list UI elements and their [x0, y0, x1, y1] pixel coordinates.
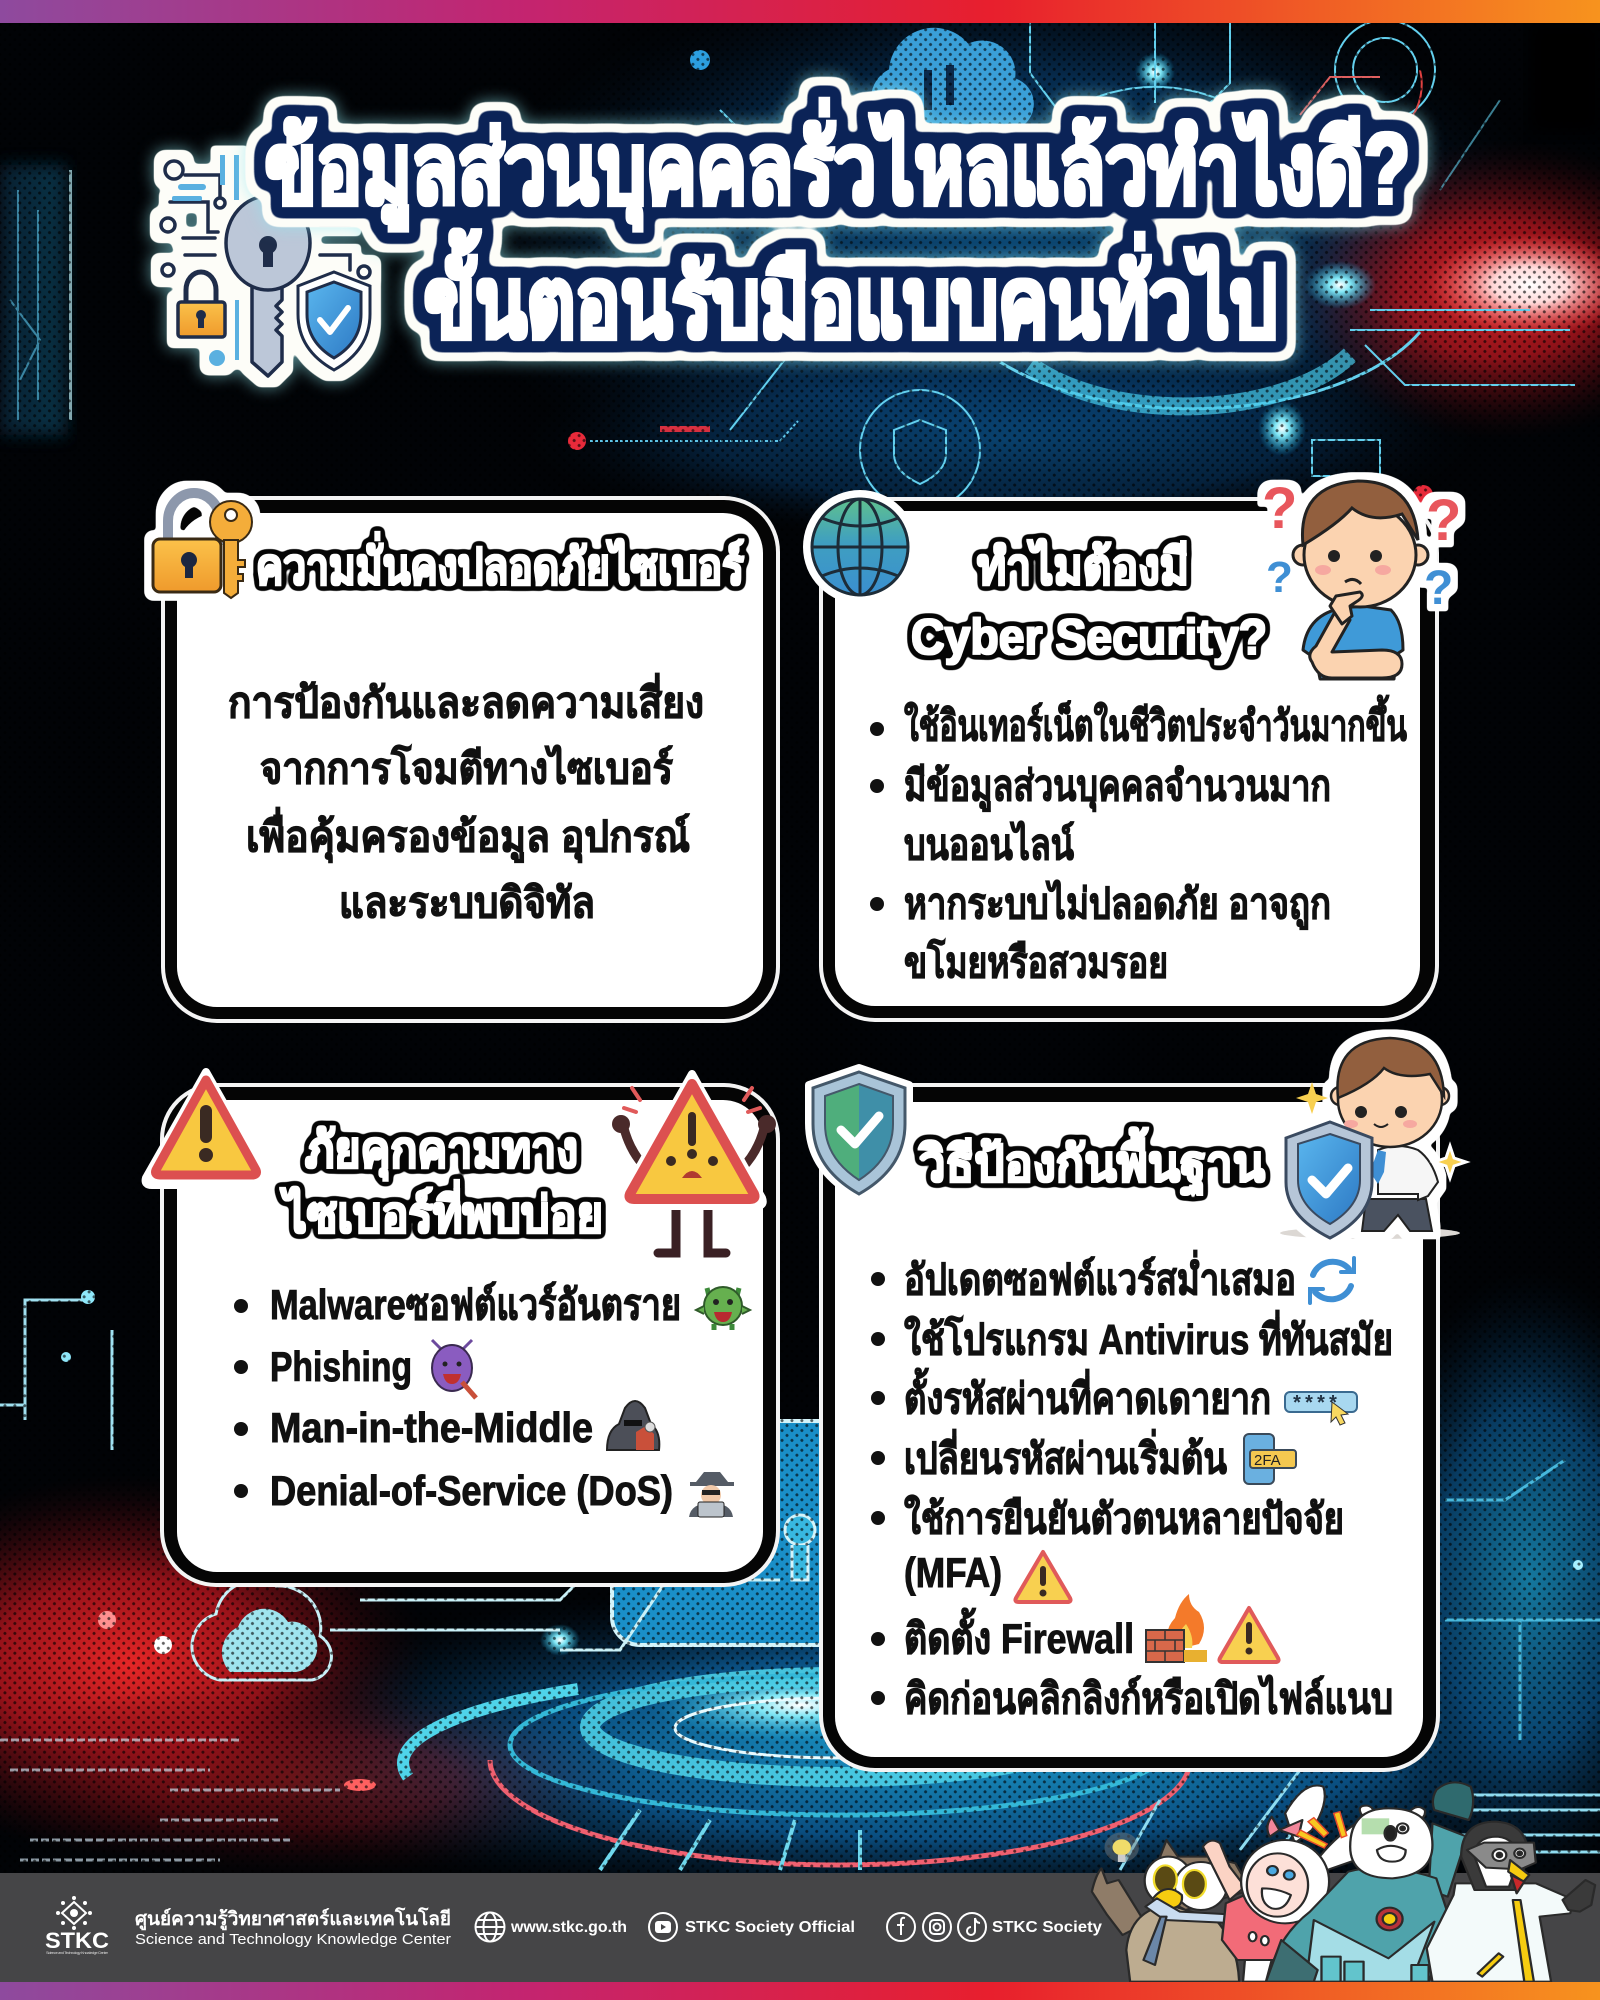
heading: cyber security: ความมั่นคงปลอดภัยไซเบอร์	[256, 532, 744, 595]
heading: threats	[279, 1122, 603, 1243]
footer: YouTube: STKC Society Official	[685, 1919, 855, 1936]
bottom gradient bar	[0, 1982, 1600, 2000]
icon: boy holding blue shield	[1286, 1038, 1449, 1238]
bullet list: threats: Man-in-the-Middle	[270, 1404, 593, 1451]
footer: STKC logo: STKC	[45, 1928, 109, 1953]
icon: green malware monster	[696, 1287, 750, 1330]
icon: shadow under boy	[1280, 1227, 1460, 1239]
icon: scared warning sign mascot	[612, 1074, 776, 1253]
body text: definition	[228, 673, 704, 926]
heading: protection: วิธีป้องกันพื้นฐาน	[918, 1127, 1265, 1196]
footer: social media	[887, 1913, 1102, 1941]
icon: purple phishing bug	[432, 1340, 476, 1398]
icon: thinking boy with question marks: ?	[1262, 476, 1297, 541]
icon: warning sign left	[146, 1072, 266, 1185]
footer: STKC logo	[45, 1896, 109, 1955]
icon: firewall	[1146, 1594, 1207, 1662]
bullet list: protection steps: ใช้การยืนยันตัวตนหลายปัจจัย	[904, 1494, 1344, 1542]
bullet list: reasons: หากระบบไม่ปลอดภัย อาจถูก	[904, 879, 1331, 930]
body text: definition: การป้องกันและลดความเสี่ยง	[228, 673, 704, 726]
icon: key, padlock and shield sticker	[161, 155, 370, 376]
icon: thinking boy with question marks: ?	[1266, 553, 1293, 602]
icon: thinking boy with question marks	[1262, 476, 1461, 679]
bullet list: protection steps: คิดก่อนคลิกลิงก์หรือเปิดไฟล์แนบ	[904, 1674, 1393, 1722]
bullet list: reasons: มีข้อมูลส่วนบุคคลจำนวนมาก	[904, 762, 1331, 812]
bullet list: threats: Malwareซอฟต์แวร์อันตราย	[270, 1281, 681, 1328]
mascot: light bulb	[1104, 1832, 1139, 1862]
icon: padlock and gold key	[153, 493, 252, 598]
footer: website: www.stkc.go.th	[510, 1919, 627, 1936]
footer: social media: STKC Society	[992, 1919, 1102, 1936]
footer: website	[476, 1912, 627, 1942]
mascots: STKC characters	[1092, 1782, 1595, 1982]
icon: refresh arrows	[1310, 1258, 1354, 1303]
heading: why	[911, 538, 1267, 665]
body text: definition: เพื่อคุ้มครองข้อมูล อุปกรณ์	[246, 807, 690, 863]
mascot: owl	[1092, 1840, 1251, 1982]
bullet list: protection steps	[871, 1250, 1393, 1722]
panel: what is cyber security	[161, 496, 780, 1023]
background: cloud and circuitry, top	[590, 20, 1575, 510]
body text: definition: จากการโจมตีทางไซเบอร์	[260, 744, 673, 792]
heading: why: Cyber Security?	[911, 609, 1267, 665]
heading: threats: ภัยคุกคามทาง	[305, 1122, 578, 1181]
background: glowing nodes, top	[568, 50, 1433, 505]
panel: why cyber security	[819, 497, 1439, 1022]
footer: organisation name	[135, 1907, 451, 1948]
mascot: polar bear	[1266, 1782, 1473, 1982]
bullet list: threats	[234, 1281, 681, 1514]
background: lock behind panels	[612, 1421, 1032, 1645]
icon: 2FA phone: 2FA	[1254, 1452, 1281, 1469]
mascot: exclamation marks	[1297, 1812, 1347, 1848]
bullet list: protection steps: ติดตั้ง Firewall	[904, 1607, 1134, 1662]
footer: organisation name: ศูนย์ความรู้วิทยาศาสตร์และเทคโนโลยี	[135, 1907, 451, 1931]
icon: thinking boy with question marks: ?	[1426, 488, 1461, 553]
icon: sparkles	[1296, 1082, 1466, 1178]
heading: why: ทำไมต้องมี	[977, 538, 1189, 595]
bullet list: protection steps: (MFA)	[904, 1549, 1002, 1596]
top gradient bar	[0, 0, 1600, 23]
icon: warning firewall	[1219, 1608, 1279, 1662]
background: upper tech glow	[450, 0, 1600, 540]
icon: green shield	[809, 1068, 909, 1197]
title	[265, 98, 1410, 359]
bullet list: reasons: ขโมยหรือสวมรอย	[904, 938, 1168, 986]
icon: password field	[1285, 1392, 1357, 1425]
footer: organisation name: Science and Technology Knowledge Center	[135, 1931, 451, 1948]
bullet list: reasons: ใช้อินเทอร์เน็ตในชีวิตประจำวันมากขึ้น	[904, 694, 1407, 749]
bullet list: protection steps: เปลี่ยนรหัสผ่านเริ่มต้น	[904, 1429, 1227, 1482]
footer band	[0, 1873, 1600, 1982]
icon: hooded hacker	[607, 1401, 659, 1450]
background: glowing nodes, bottom	[61, 1290, 1583, 1791]
bullet list: protection steps: ใช้โปรแกรม Antivirus ที่ทันสมัย	[904, 1310, 1393, 1363]
icon: warning MFA	[1015, 1552, 1071, 1602]
bullet list: protection steps: ตั้งรหัสผ่านที่คาดเดายาก	[904, 1367, 1271, 1422]
title: ขั้นตอนรับมือแบบคนทั่วไป	[424, 229, 1277, 359]
icon: globe	[803, 490, 917, 604]
mascot: penguin	[1427, 1822, 1595, 1982]
bullet list: protection steps: อัปเดตซอฟต์แวร์สม่ำเสมอ	[904, 1250, 1296, 1303]
icon: 2FA phone	[1244, 1434, 1296, 1484]
background: lower tech glow	[0, 1270, 1600, 1915]
body text: definition: และระบบดิจิทัล	[339, 879, 595, 926]
heading: threats: ไซเบอร์ที่พบบ่อย	[279, 1180, 603, 1243]
icon: thinking boy with question marks: ?	[1424, 562, 1453, 615]
panel: common threats	[160, 1083, 780, 1587]
footer: STKC logo: Science and Technology Knowledge Center	[46, 1950, 109, 1955]
footer: YouTube	[649, 1913, 855, 1941]
icon: password field: ****	[1291, 1394, 1339, 1417]
mascot: bunny	[1203, 1786, 1362, 1982]
bullet list: threats: Phishing	[270, 1343, 412, 1390]
icon: spy with laptop	[689, 1472, 734, 1517]
bullet list: reasons: บนออนไลน์	[904, 820, 1074, 868]
background: cloud outline and rings, bottom	[0, 1300, 1600, 1870]
panel: basic protection	[819, 1083, 1440, 1772]
bullet list: reasons	[870, 694, 1407, 986]
bullet list: threats: Denial-of-Service (DoS)	[270, 1467, 673, 1514]
background: left data strip	[0, 165, 72, 435]
